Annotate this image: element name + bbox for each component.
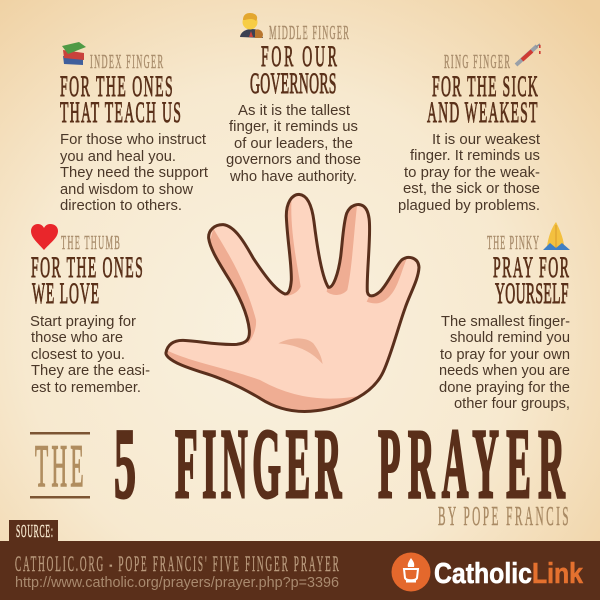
label: index finger: INDEX FINGER [90, 51, 163, 73]
text block: ring finger description: plagued by problems. [398, 197, 540, 214]
heading: for the sick and weakest: FOR THE SICK [432, 70, 538, 104]
heading: for our governors: FOR OUR [261, 40, 337, 74]
text block: thumb description: They are the easi- [31, 362, 150, 379]
text block: middle finger description: governors and those [226, 151, 361, 168]
label: the thumb: THE THUMB [61, 232, 120, 254]
subtitle: BY POPE FRANCIS [438, 503, 569, 532]
text block: pinky description: done praying for the [439, 379, 570, 396]
text block: index finger description: and wisdom to show [60, 181, 193, 198]
text block: ring finger description: est, the sick or those [403, 180, 540, 197]
panel: index finger [60, 42, 209, 214]
source url: http://www.catholic.org/prayers/prayer.php?p=3396 [15, 574, 339, 591]
logo: Catholic Link [392, 552, 584, 592]
heading line two: WE LOVE [32, 277, 99, 311]
text block: pinky description: should remind you [450, 329, 570, 346]
palm crease [278, 338, 323, 364]
title [30, 408, 569, 532]
text block: thumb description: closest to you. [31, 346, 125, 363]
heading line two: YOURSELF [495, 277, 569, 311]
heading: for the ones that teach us: FOR THE ONES [60, 70, 173, 104]
icon: syringe [516, 44, 541, 65]
text block: thumb description: est to remember. [31, 379, 141, 396]
icon: books [62, 42, 86, 65]
text block: index finger description: direction to others. [60, 197, 182, 214]
label: middle finger: MIDDLE FINGER [269, 22, 349, 44]
text block: pinky description: The smallest finger- [441, 313, 570, 330]
source title: CATHOLIC.ORG - POPE FRANCIS' FIVE FINGER PRAYER [15, 551, 339, 576]
text block: middle finger description: of our leaders, the [234, 135, 353, 152]
heading line two: GOVERNORS [250, 67, 336, 101]
text block: middle finger description [226, 102, 361, 185]
source tag: SOURCE: [16, 521, 53, 541]
text block: ring finger description: to pray for the weak- [404, 164, 540, 181]
icon: man in suit [240, 13, 263, 38]
panel: ring finger [398, 44, 541, 214]
text block: pinky description [439, 313, 570, 412]
text block: ring finger description [398, 131, 541, 214]
text block: thumb description: Start praying for [30, 313, 136, 330]
label: the pinky: THE PINKY [487, 232, 539, 254]
heading line two: THAT TEACH US [60, 96, 181, 130]
title word: prayer: PRAYER [378, 409, 566, 520]
text block: ring finger description: It is our weakest [432, 131, 541, 148]
label: ring finger: RING FINGER [444, 51, 510, 73]
title word: 5: 5 [114, 408, 136, 519]
text block: index finger description: For those who instruct [60, 131, 207, 148]
text block: pinky description: needs when you are [439, 362, 570, 379]
heading: pray for yourself: PRAY FOR [493, 251, 569, 285]
text block: middle finger description: As it is the tallest [238, 102, 351, 119]
text block: ring finger description: finger. It reminds us [410, 147, 540, 164]
logo: Catholic Link: CatholicLink [434, 558, 584, 590]
title word: the: THE [35, 433, 84, 499]
heading line two: AND WEAKEST [427, 96, 537, 130]
icon: heart [31, 224, 58, 250]
footer bar [0, 541, 600, 600]
text block: middle finger description: finger, it reminds us [229, 118, 358, 135]
panel: the thumb [30, 224, 150, 396]
heading: for the ones we love: FOR THE ONES [31, 251, 143, 285]
text block: thumb description: those who are [31, 329, 123, 346]
panel: the pinky [439, 222, 570, 412]
text block: index finger description [60, 131, 209, 214]
text block: index finger description: you and heal you. [60, 148, 176, 165]
panel: middle finger [226, 13, 361, 185]
text block: thumb description [30, 313, 150, 396]
icon: praying hands [543, 222, 570, 250]
text block: middle finger description: who have authority. [229, 168, 357, 185]
title word: finger: FINGER [175, 409, 342, 520]
text block: pinky description: to pray for your own [440, 346, 570, 363]
text block: index finger description: They need the support [60, 164, 209, 181]
text block: pinky description: other four groups, [454, 395, 570, 412]
illustration: open hand [160, 194, 419, 420]
source tag [9, 520, 58, 542]
